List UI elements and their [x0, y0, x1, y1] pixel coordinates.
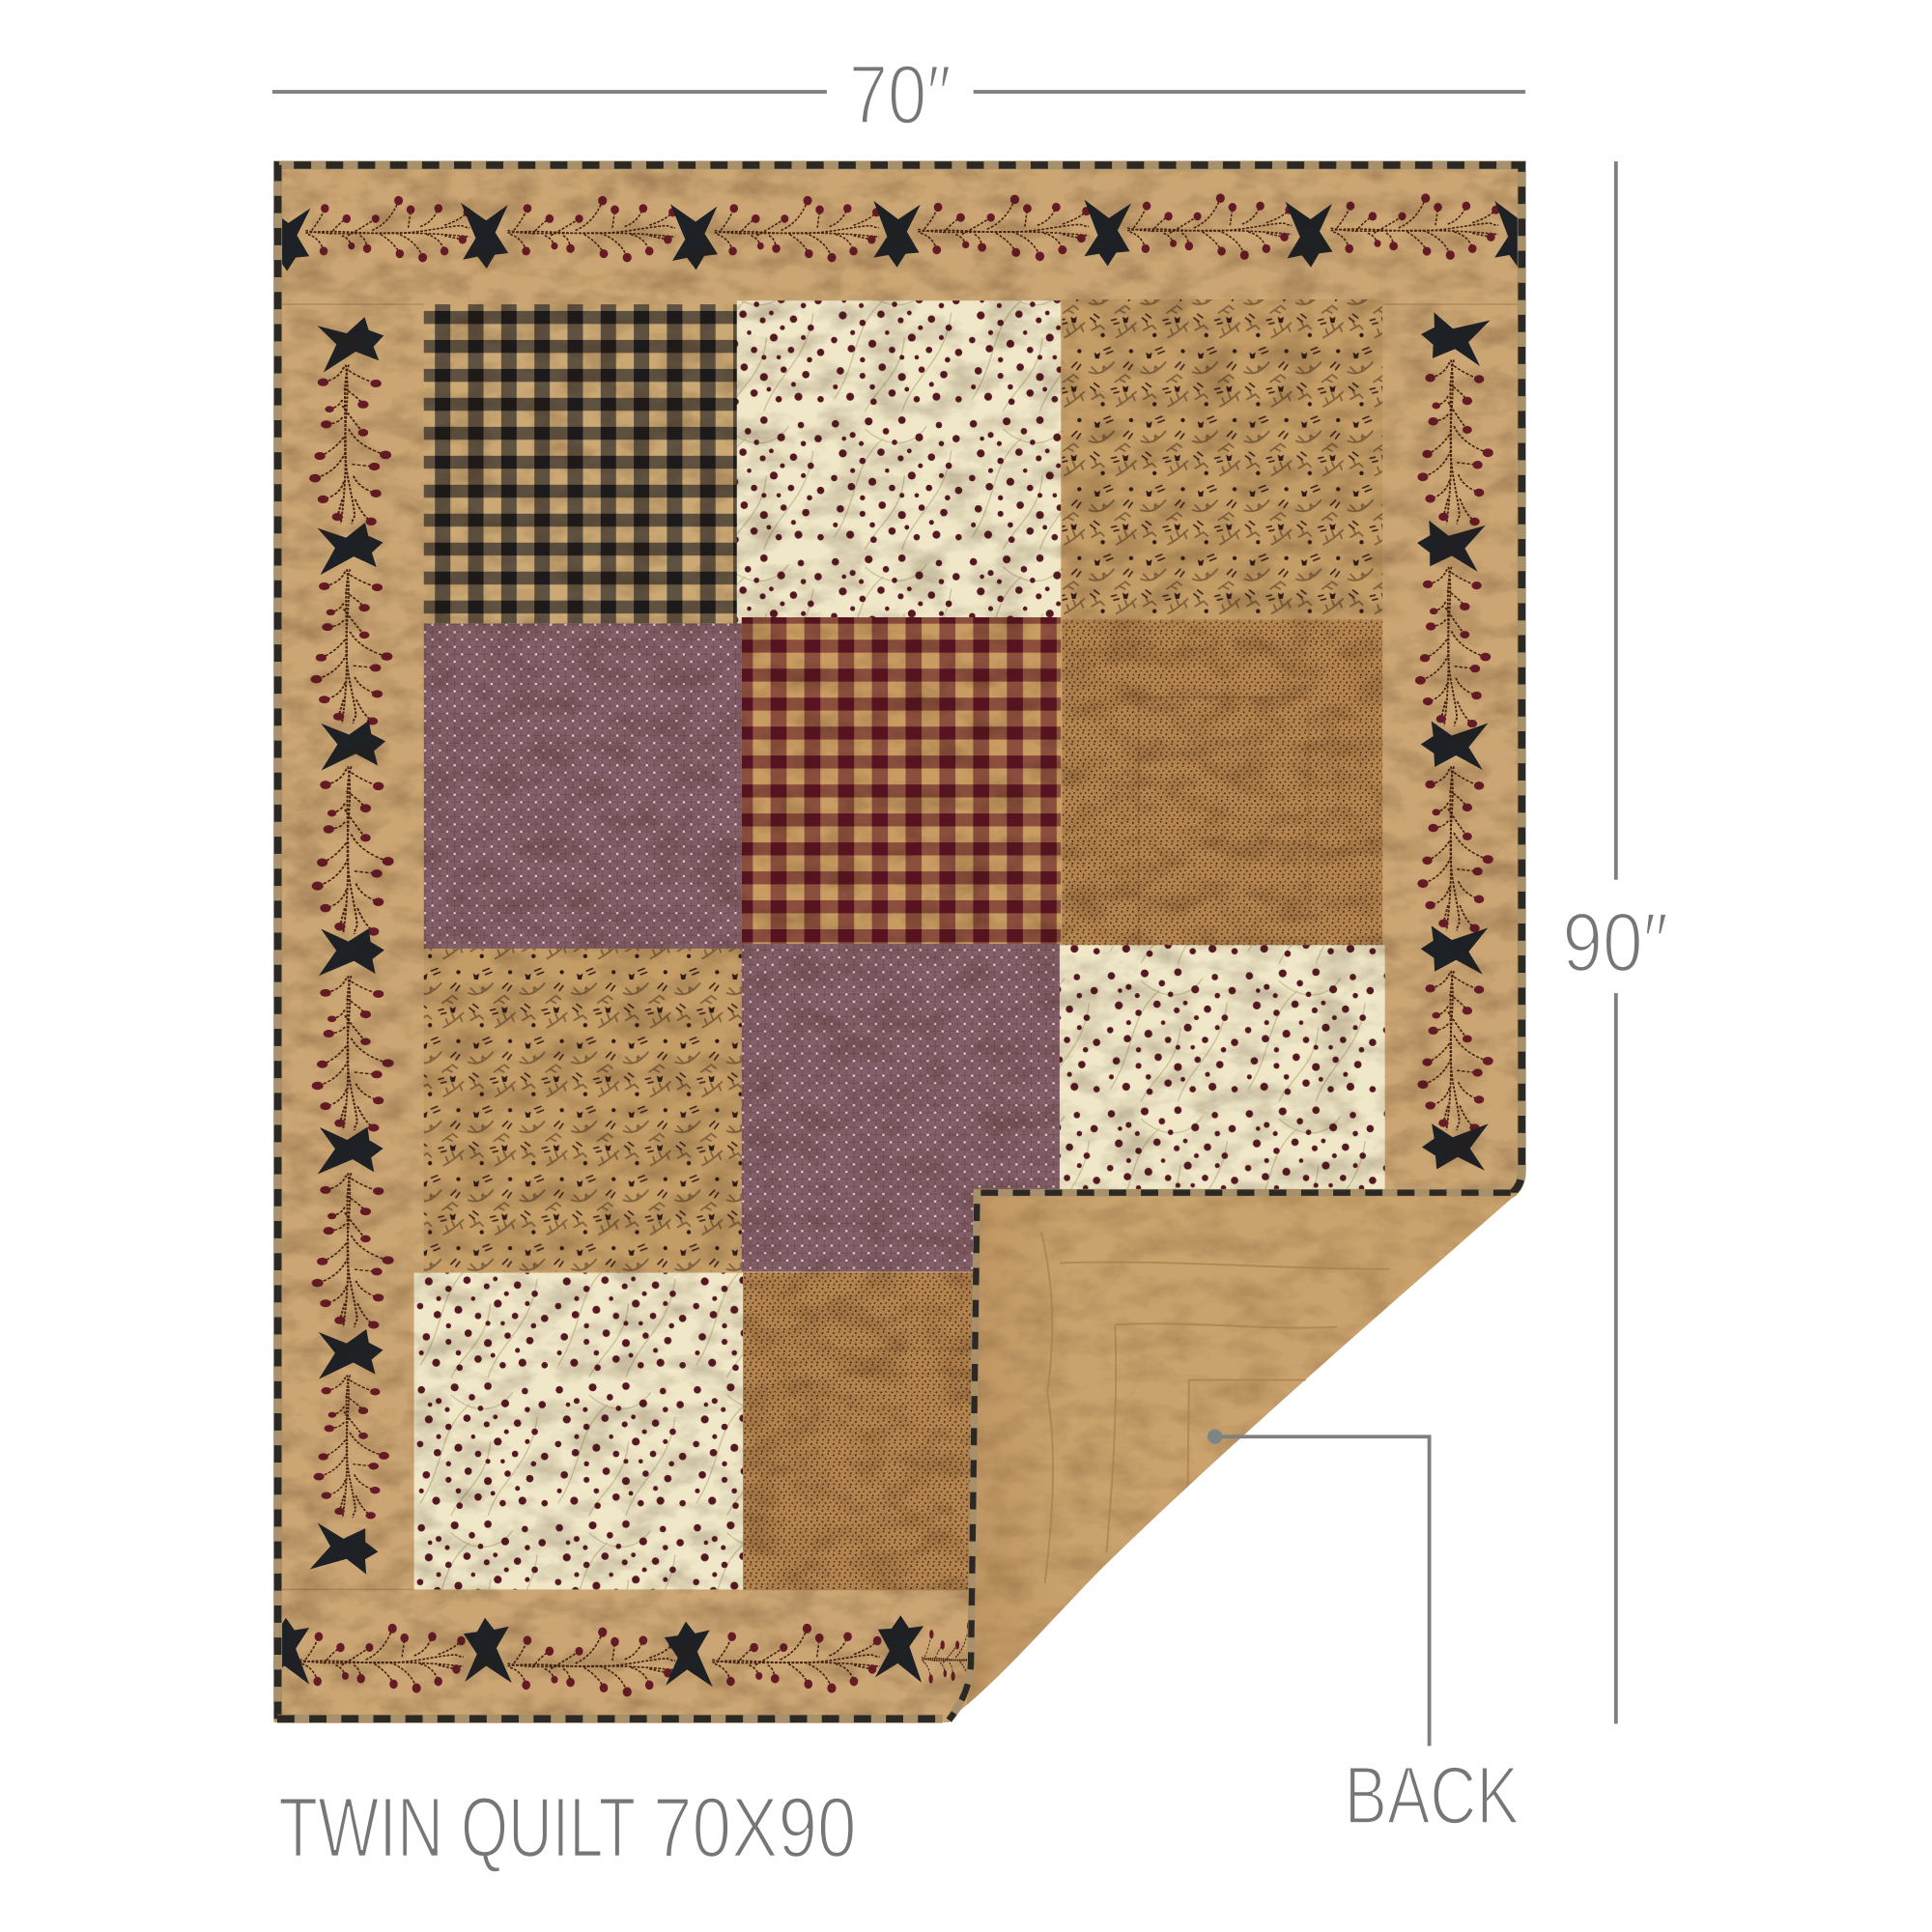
- patch: cream berries top: [737, 300, 1061, 623]
- right vine: [1415, 359, 1493, 1132]
- patch: brown right: [1062, 620, 1382, 947]
- patch: mauve left: [424, 623, 742, 949]
- folded back corner: [949, 1189, 1521, 1725]
- patch: black gingham: [424, 304, 739, 623]
- patch: cream berries bottom: [414, 1273, 743, 1589]
- product title: QUILT: [461, 1779, 636, 1875]
- patch: red gingham: [742, 617, 1061, 947]
- bottom vine: [299, 1621, 1007, 1696]
- quilting and border seams: [281, 304, 1518, 1589]
- left stars: [310, 313, 388, 1575]
- tan border: [273, 161, 1525, 1722]
- product title: 70X90: [653, 1779, 856, 1875]
- patch: mauve center: [742, 944, 1060, 1271]
- product title: TWIN: [278, 1779, 443, 1875]
- quilt: [263, 161, 1542, 1725]
- fabric shading: [273, 161, 1525, 1722]
- height line bottom: [1614, 993, 1618, 1723]
- callout label: BACK: [1345, 1750, 1520, 1841]
- width line right: [974, 90, 1525, 94]
- patch: tan floral bottom: [424, 949, 742, 1271]
- bottom stars: [263, 1614, 924, 1690]
- width label: 70″: [849, 48, 952, 142]
- top stars: [264, 200, 1542, 271]
- patch: tan floral top: [1062, 299, 1382, 623]
- quilt binding: [277, 165, 1521, 1719]
- patch: cream berries right: [1060, 945, 1385, 1198]
- back binding: [949, 1193, 1511, 1720]
- product title: [278, 1779, 856, 1875]
- top vine: [305, 193, 1500, 262]
- height line top: [1614, 161, 1618, 880]
- quilting lines: [1041, 1233, 1390, 1583]
- back shading: [967, 1189, 1521, 1725]
- quilt front: [263, 161, 1542, 1722]
- callout leader line: [1215, 1436, 1430, 1746]
- back callout: [1208, 1430, 1520, 1841]
- width dimension: [272, 48, 1525, 142]
- back fabric: [952, 1193, 1518, 1718]
- height dimension: [1562, 161, 1668, 1723]
- left vine: [309, 365, 394, 1519]
- callout dot: [1208, 1430, 1222, 1444]
- height label: 90″: [1562, 895, 1668, 989]
- width line left: [272, 90, 827, 94]
- right stars: [1415, 311, 1491, 1171]
- patch: brown bottom: [743, 1273, 977, 1589]
